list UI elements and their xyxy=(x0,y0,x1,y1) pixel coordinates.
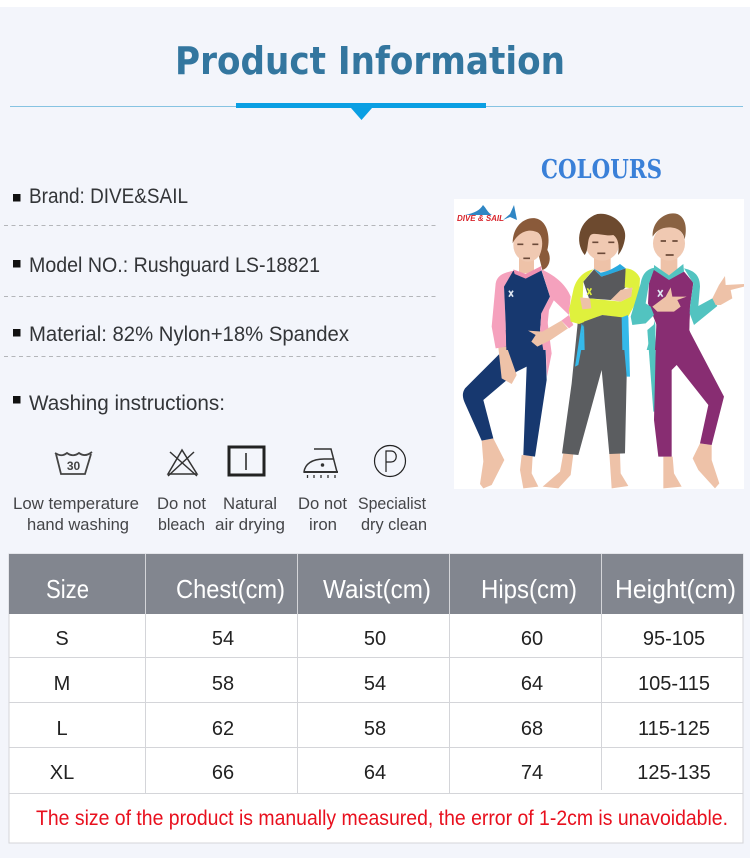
icon: specialist dry clean xyxy=(374,446,406,476)
brand line: Brand: DIVE&SAIL xyxy=(29,185,188,208)
row S: 50 xyxy=(364,628,386,650)
row S: 54 xyxy=(212,628,234,650)
size table xyxy=(9,554,743,843)
table header row: Hips(cm) xyxy=(481,574,577,604)
row L: 58 xyxy=(364,718,386,740)
row M: 105-115 xyxy=(638,673,710,695)
child in purple and teal xyxy=(631,213,744,350)
icon: natural air drying xyxy=(229,447,264,475)
row L xyxy=(56,718,710,740)
title divider with pointer xyxy=(10,103,743,120)
brand logo: DIVE & SAIL xyxy=(457,214,504,223)
icon: hand wash 30 xyxy=(55,452,92,474)
material line: Material: 82% Nylon+18% Spandex xyxy=(29,323,349,346)
washing labels: Do not xyxy=(157,495,206,513)
table header row xyxy=(9,554,743,614)
washing labels: Natural xyxy=(223,495,277,513)
row L: 62 xyxy=(212,718,234,740)
table header row: Height(cm) xyxy=(615,574,736,604)
table header row: Chest(cm) xyxy=(176,574,285,604)
row XL: XL xyxy=(50,762,74,784)
row L: 68 xyxy=(521,718,543,740)
row XL: 64 xyxy=(364,762,386,784)
table header row: Size xyxy=(46,574,89,604)
product photo xyxy=(454,199,744,489)
child in grey and yellow xyxy=(569,214,640,350)
brand logo xyxy=(457,205,517,223)
washing labels: dry clean xyxy=(361,516,427,534)
washing labels: hand washing xyxy=(27,516,129,534)
row M: 58 xyxy=(212,673,234,695)
icon: do not bleach xyxy=(168,450,197,476)
row XL: 66 xyxy=(212,762,234,784)
colours heading: COLOURS xyxy=(541,155,662,185)
row L: 115-125 xyxy=(638,718,710,740)
row S: S xyxy=(55,628,69,650)
washing labels: Do not xyxy=(298,495,347,513)
table header row: Waist(cm) xyxy=(323,574,431,604)
washing labels: air drying xyxy=(215,516,285,534)
washing labels: bleach xyxy=(158,516,205,534)
row M: 54 xyxy=(364,673,386,695)
title: Product Information xyxy=(175,39,565,83)
row S: 60 xyxy=(521,628,543,650)
lower bodies xyxy=(463,310,724,488)
row XL: 125-135 xyxy=(637,762,711,784)
row XL: 74 xyxy=(521,762,543,784)
row M: 64 xyxy=(521,673,543,695)
model line: Model NO.: Rushguard LS-18821 xyxy=(29,254,320,277)
washing labels xyxy=(13,495,427,534)
row M: M xyxy=(54,673,70,695)
washing instructions heading: Washing instructions: xyxy=(29,392,225,415)
row M xyxy=(54,673,710,695)
washing labels: Low temperature xyxy=(13,495,139,513)
icon: hand wash 30: 30 xyxy=(67,459,80,473)
row S xyxy=(55,628,705,650)
child in navy and pink xyxy=(492,218,573,350)
washing labels: Specialist xyxy=(358,495,426,513)
row XL xyxy=(50,762,711,784)
row L: L xyxy=(56,718,68,740)
icon: do not iron xyxy=(304,449,338,478)
row S: 95-105 xyxy=(643,628,705,650)
washing labels: iron xyxy=(309,516,337,534)
